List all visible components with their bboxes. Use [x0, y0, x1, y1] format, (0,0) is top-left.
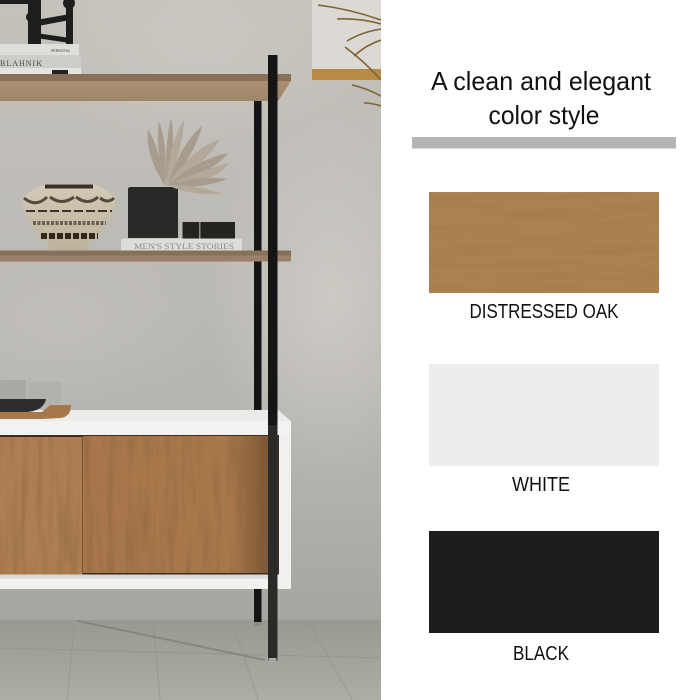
swatch: white — [429, 364, 659, 496]
wall background — [0, 0, 381, 620]
back leg foot — [254, 622, 262, 626]
patterned ceramic vase — [23, 184, 115, 250]
swatch: black — [429, 531, 659, 665]
cabinet interior shadow — [0, 435, 279, 575]
heading — [431, 66, 652, 130]
glasses on cabinet — [0, 380, 61, 399]
divider bar — [412, 137, 676, 148]
floor tiles — [0, 620, 381, 700]
front post — [268, 55, 278, 662]
black sculpture — [0, 0, 75, 44]
middle shelf — [0, 250, 291, 262]
swatch: distressed oak — [429, 192, 659, 323]
back post — [254, 101, 262, 625]
swatch: distressed oak: DISTRESSED OAK — [470, 301, 619, 323]
small black boxes — [182, 222, 235, 238]
sliding door left — [0, 437, 82, 575]
heading: A clean and elegant — [431, 66, 652, 96]
swatch: black: BLACK — [513, 643, 570, 665]
cabinet side panel — [279, 435, 291, 581]
swatch: white: WHITE — [512, 474, 570, 496]
sliding door right — [83, 436, 268, 573]
men's style stories book: MEN'S STYLE STORIES — [134, 241, 234, 251]
photo: shelving unit in a room — [0, 0, 381, 700]
books on top shelf: PERROTIN — [51, 49, 70, 53]
books on top shelf — [0, 44, 81, 74]
heading: color style — [488, 100, 600, 130]
tray and bowl — [0, 399, 71, 419]
men's style stories book — [121, 238, 242, 251]
black cylinder vase — [128, 187, 178, 238]
cabinet top — [0, 410, 291, 435]
dried palm fan — [148, 118, 229, 194]
top shelf — [0, 74, 291, 101]
cabinet bottom — [0, 574, 291, 589]
framed picture with palm leaves — [312, 0, 381, 106]
books on top shelf: BLAHNIK — [0, 59, 43, 68]
